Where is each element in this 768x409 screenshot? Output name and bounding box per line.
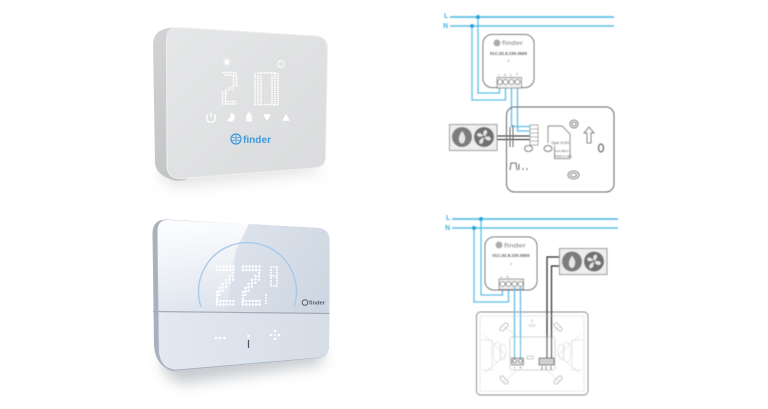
top mark (528, 318, 536, 328)
phase labels (443, 13, 449, 30)
relay module: 01C.02.8.230.0500 (492, 253, 530, 258)
logo: finder grey (302, 300, 326, 306)
button icons row (206, 112, 290, 122)
thermostat wires (497, 136, 530, 140)
back plate label: 1xA 250V~ (555, 149, 570, 153)
back plate label: Type 1C91 (551, 141, 569, 145)
centre indicator bar (248, 340, 250, 348)
control and load wires (514, 257, 559, 360)
mains lines (452, 219, 618, 302)
glass highlight (158, 220, 249, 312)
phase labels: L (444, 13, 449, 20)
top mark: TOP (528, 324, 536, 328)
relay module: finder (502, 41, 524, 47)
back plate label (551, 141, 573, 158)
junction dots (470, 15, 480, 28)
display digits: 2 0 (222, 72, 278, 105)
relay module: L (498, 73, 500, 77)
device: white thermostat with finder logo (153, 27, 328, 187)
thermostat back plate (506, 107, 614, 192)
icon: status ring (278, 61, 284, 67)
phase labels: N (443, 23, 448, 30)
relay module (485, 237, 537, 290)
lower touch panel (158, 312, 330, 370)
wiring diagram: bottom (445, 215, 618, 395)
touch controls (215, 330, 280, 340)
relay module (483, 34, 534, 88)
thermostat mounting plate (476, 312, 588, 395)
back plate label: Made in Italy (555, 154, 573, 158)
terminal blocks: + (519, 365, 522, 370)
terminal blocks (512, 356, 554, 370)
phase labels: L (446, 215, 451, 222)
relay module: N (504, 73, 506, 77)
logo: finder blue: finder (243, 134, 271, 146)
relay module: 2 (516, 72, 518, 76)
phase labels: N (445, 225, 450, 232)
relay module: L (501, 275, 503, 279)
wiring diagram: top (443, 13, 614, 192)
relay module: 1 (510, 73, 512, 77)
temperature arc (198, 243, 296, 307)
heating and fan box (450, 124, 497, 150)
relay module: N (506, 275, 509, 279)
terminal blocks: − (513, 365, 516, 370)
mains lines (450, 17, 614, 131)
relay module: finder (504, 244, 527, 250)
junction dots (472, 217, 483, 230)
heating and fan box (560, 248, 607, 274)
icon: sun mode (222, 58, 232, 66)
phase labels (445, 215, 451, 232)
logo: finder grey: finder (309, 300, 326, 306)
logo: finder blue (231, 134, 271, 146)
relay module: 01C.02.8.230.0500 (490, 51, 528, 56)
top mark: 0 (531, 318, 534, 323)
display digits: 2 2 . degree (217, 266, 277, 304)
device: glass smart thermostat (152, 220, 330, 383)
